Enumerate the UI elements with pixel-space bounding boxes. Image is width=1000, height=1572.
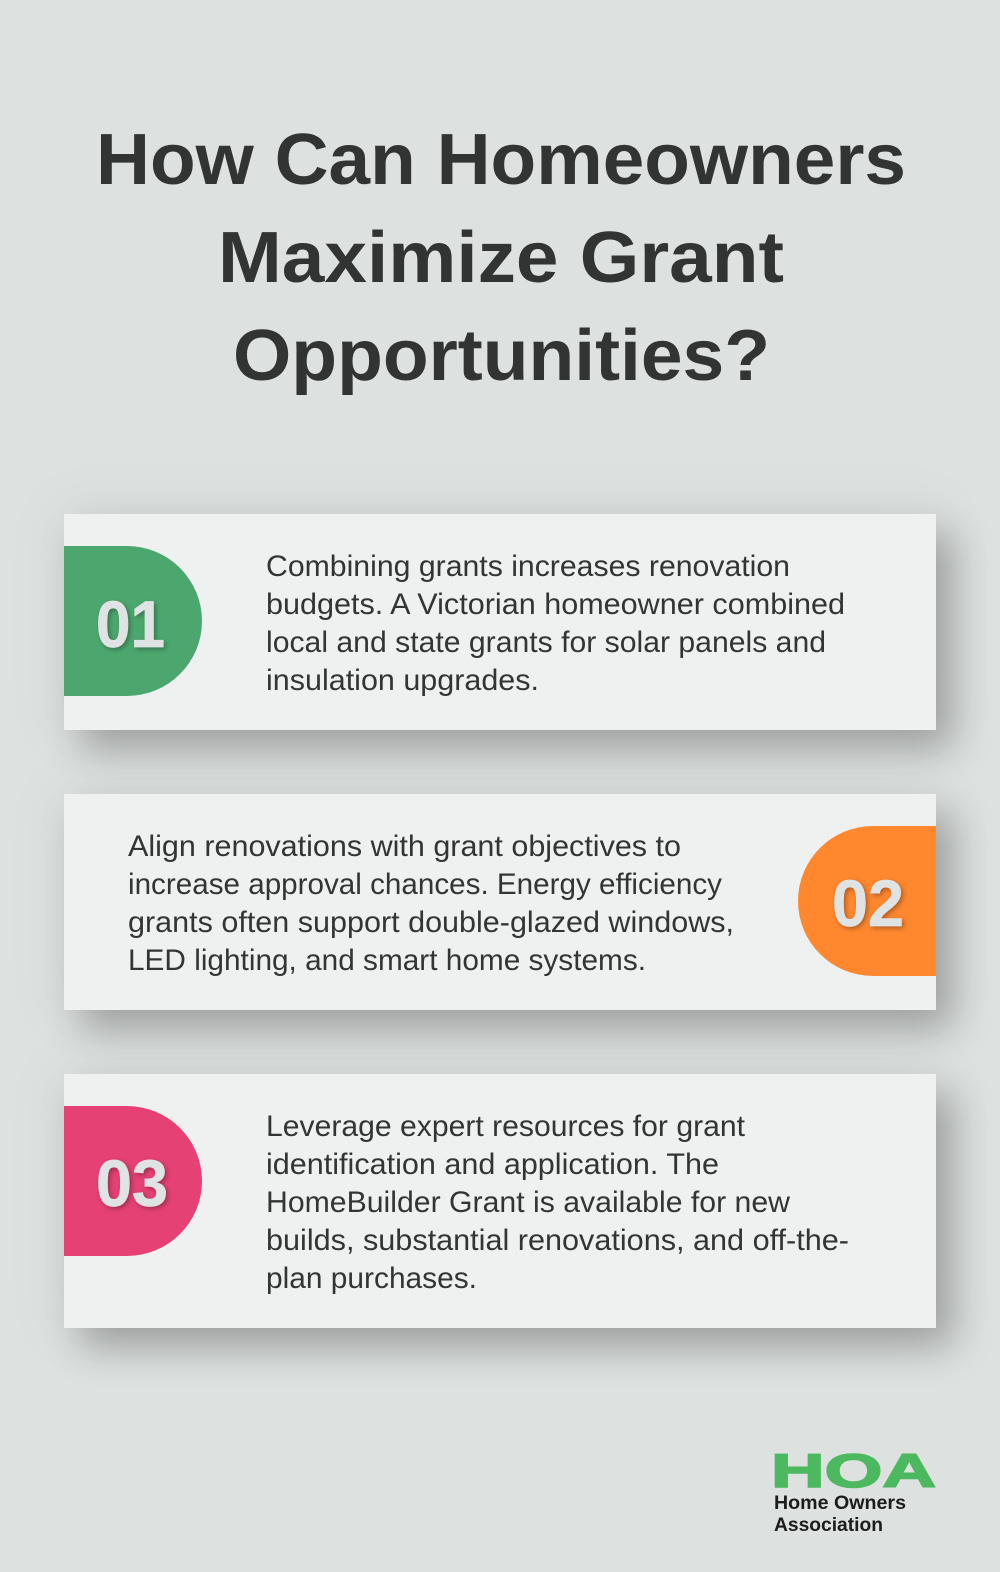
text block: step 01: budgets. A Victorian homeowner combined bbox=[266, 588, 845, 621]
logo: Home Owners Association: HOA bbox=[771, 1445, 936, 1497]
panel: step 03 bbox=[64, 1074, 936, 1328]
badge: 01 bbox=[64, 546, 202, 696]
text block: step 02 bbox=[128, 830, 734, 977]
text block: step 02: increase approval chances. Energy efficiency bbox=[128, 868, 722, 901]
text block: step 03 bbox=[266, 1110, 849, 1295]
text block: step 01: insulation upgrades. bbox=[266, 664, 539, 697]
logo: Home Owners Association bbox=[771, 1445, 936, 1536]
text block: step 01: Combining grants increases renovation bbox=[266, 550, 790, 583]
title: Opportunities? bbox=[233, 316, 770, 396]
text block: step 01: local and state grants for solar panels and bbox=[266, 626, 826, 659]
badge: 03: 03 bbox=[96, 1146, 168, 1220]
title bbox=[96, 120, 906, 396]
badge: 01: 01 bbox=[96, 587, 165, 661]
logo: Home Owners Association: Association bbox=[774, 1515, 883, 1536]
badge: 02 bbox=[798, 826, 936, 976]
title: Maximize Grant bbox=[218, 218, 784, 298]
text block: step 03: builds, substantial renovations, and off-the- bbox=[266, 1224, 849, 1257]
text block: step 03: Leverage expert resources for grant bbox=[266, 1110, 745, 1143]
title: How Can Homeowners bbox=[96, 120, 906, 200]
text block: step 02: Align renovations with grant objectives to bbox=[128, 830, 681, 863]
logo: Home Owners Association: Home Owners bbox=[774, 1493, 906, 1514]
badge: 02: 02 bbox=[832, 866, 904, 940]
text block: step 03: HomeBuilder Grant is available for new bbox=[266, 1186, 791, 1219]
panel: step 01 bbox=[64, 514, 936, 730]
text block: step 03: identification and application. The bbox=[266, 1148, 719, 1181]
panel: step 02 bbox=[64, 794, 936, 1010]
text block: step 03: plan purchases. bbox=[266, 1262, 477, 1295]
text block: step 01 bbox=[266, 550, 845, 697]
text block: step 02: grants often support double-glazed windows, bbox=[128, 906, 734, 939]
badge: 03 bbox=[64, 1106, 202, 1256]
text block: step 02: LED lighting, and smart home systems. bbox=[128, 944, 646, 977]
